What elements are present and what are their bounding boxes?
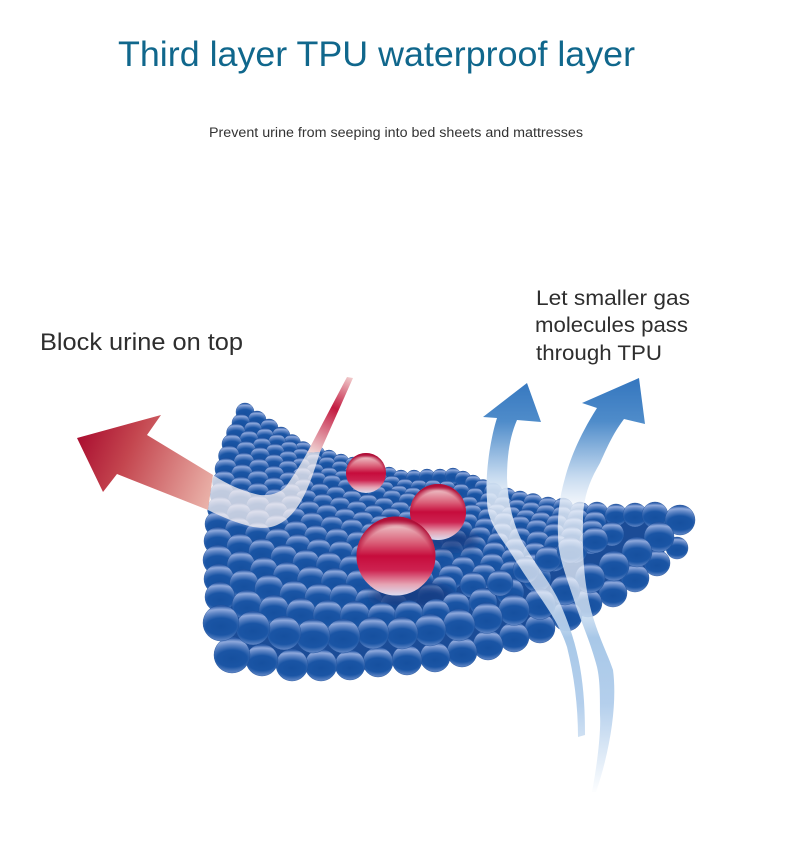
large droplet <box>356 516 436 596</box>
medium droplet <box>410 484 466 540</box>
blue arrow: right gas path <box>558 378 645 792</box>
title: Third layer TPU waterproof layer <box>118 35 635 74</box>
blue arrow: left gas path <box>483 383 585 737</box>
label: gas molecules: Let smaller gas <box>536 287 690 310</box>
label: block urine: Block urine on top <box>40 329 243 356</box>
arrow head and shaft <box>77 415 213 510</box>
back sphere rows <box>203 403 668 620</box>
small droplet <box>346 453 386 493</box>
red arrow: urine blocked <box>77 377 353 528</box>
subtitle: Prevent urine from seeping into bed sheets and mattresses <box>209 125 583 140</box>
shadows under urine droplets <box>370 530 478 610</box>
arrow tail <box>307 377 353 453</box>
label: gas molecules: molecules pass <box>535 314 688 337</box>
front sphere row <box>203 522 674 653</box>
TPU molecular sheet <box>203 403 695 681</box>
label: gas molecules <box>535 287 690 365</box>
urine droplets <box>346 453 466 596</box>
bottom sphere layer <box>214 537 688 681</box>
right and mid sphere rows <box>205 527 608 632</box>
label: gas molecules: through TPU <box>536 342 662 365</box>
sheet underlay <box>215 412 680 672</box>
translucent bend over sheet <box>208 452 320 528</box>
tip sphere <box>665 505 695 535</box>
